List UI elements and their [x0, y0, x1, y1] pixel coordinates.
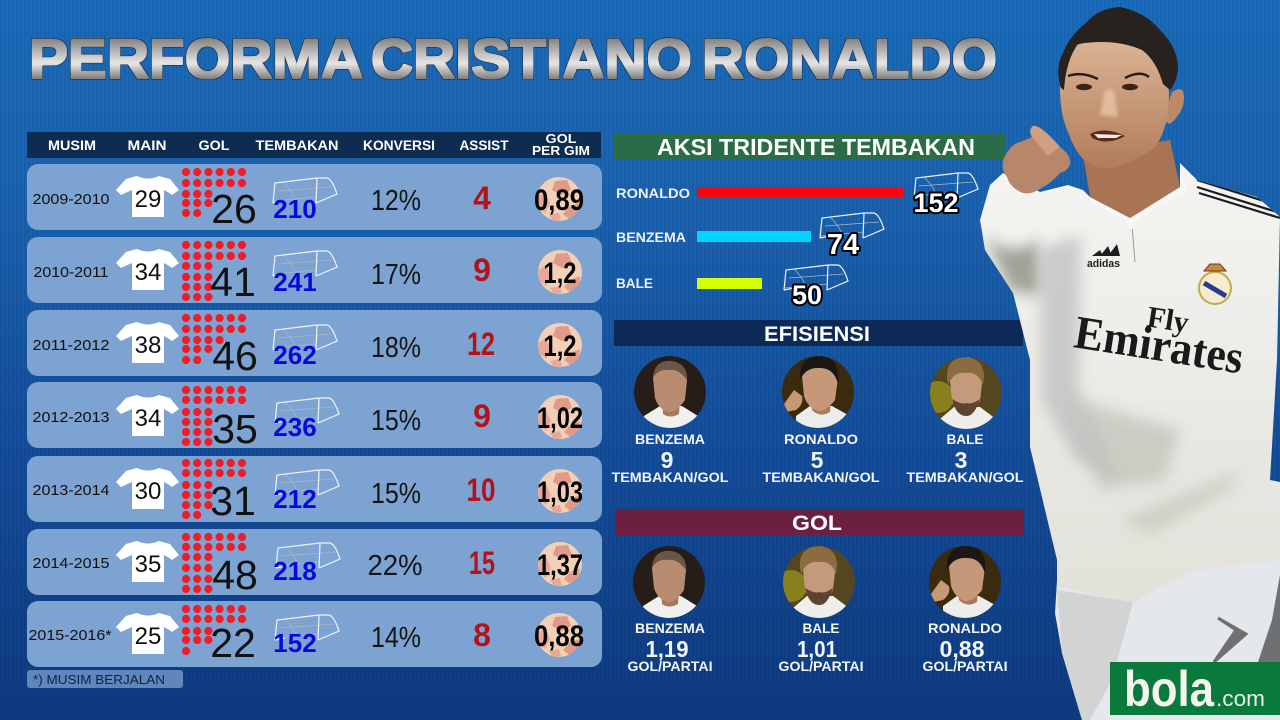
table header: MUSIM [48, 138, 96, 153]
row 2011-2012: 38 [135, 332, 161, 359]
player: Benzema: 1,19 [646, 636, 688, 662]
neck [1083, 140, 1180, 218]
jersey [980, 163, 1280, 602]
player: Benzema: BENZEMA [635, 620, 705, 636]
shorts [1055, 550, 1280, 720]
row 2014-2015: 218 [273, 556, 317, 586]
row 2011-2012: 1,2 [544, 330, 576, 363]
player: Bale: 1,01 [797, 636, 837, 662]
row 2014-2015: 2014-2015 [32, 555, 109, 572]
row 2011-2012 [27, 310, 602, 379]
row 2013-2014: 2013-2014 [32, 482, 109, 499]
row 2012-2013 [27, 382, 602, 452]
row 2009-2010: 29 [135, 186, 161, 213]
player: Benzema: BENZEMA [635, 431, 705, 447]
row 2010-2011: 1,2 [544, 257, 576, 290]
row 2012-2013: 236 [273, 412, 317, 442]
head [1058, 7, 1184, 169]
footnote: *) MUSIM BERJALAN [33, 672, 165, 687]
footnote [27, 670, 183, 688]
panel: efisiensi [612, 320, 1024, 485]
player: Benzema: GOL/PARTAI [628, 658, 712, 674]
row 2010-2011 [27, 237, 602, 305]
player: Bale: GOL/PARTAI [778, 658, 864, 674]
row 2013-2014: 31 [210, 478, 256, 524]
row 2015-2016: 8 [473, 617, 491, 653]
row 2011-2012: 262 [273, 340, 317, 370]
row 2014-2015: 22% [368, 550, 422, 582]
player: Benzema [628, 546, 712, 674]
player: Bale: BALE [802, 620, 840, 636]
row 2012-2013: 9 [473, 398, 491, 434]
row 2009-2010: 210 [273, 194, 317, 224]
row 2009-2010: 26 [211, 186, 257, 232]
table header [27, 132, 601, 158]
pointing hand [1003, 126, 1070, 193]
player: Ronaldo: TEMBAKAN/GOL [762, 469, 880, 485]
player: Ronaldo [922, 545, 1008, 674]
club crest [1199, 264, 1231, 304]
bar: Ronaldo [616, 173, 978, 218]
player: Benzema [612, 356, 729, 485]
row 2015-2016: 25 [135, 623, 161, 650]
row 2009-2010: 4 [473, 180, 491, 216]
row 2014-2015: 1,37 [537, 549, 583, 582]
player: Benzema: TEMBAKAN/GOL [612, 469, 729, 485]
row 2012-2013: 15% [371, 405, 421, 437]
player: Bale: TEMBAKAN/GOL [906, 469, 1024, 485]
illustration: Cristiano Ronaldo pointing [980, 7, 1280, 720]
bar: Bale [616, 265, 848, 310]
panel: aksi trident tembakan [614, 133, 1006, 310]
logo: bola.com: bola [1124, 661, 1215, 717]
row 2012-2013: 2012-2013 [32, 409, 109, 426]
player: Ronaldo: RONALDO [928, 620, 1002, 636]
row 2009-2010: 0,89 [534, 184, 584, 217]
sponsor text: Emirates [1071, 306, 1247, 384]
row 2014-2015 [27, 529, 602, 598]
heading [614, 320, 1023, 346]
table header: TEMBAKAN [256, 138, 338, 153]
table header: GOL [198, 138, 230, 153]
logo: bola.com [1110, 661, 1280, 717]
heading [615, 509, 1024, 535]
title: PERFORMA CRISTIANO RONALDO [29, 27, 997, 90]
table header: MAIN [128, 138, 166, 153]
heading: AKSI TRIDENTE TEMBAKAN [657, 134, 975, 160]
player: Ronaldo: 0,88 [940, 636, 985, 662]
row 2010-2011: 241 [273, 267, 317, 297]
table header: ASSIST [460, 138, 509, 153]
row 2009-2010: 2009-2010 [32, 191, 109, 208]
bar: Benzema [616, 213, 884, 261]
row 2011-2012: 46 [212, 333, 258, 379]
row 2015-2016 [27, 601, 602, 667]
brand logo on jersey [1087, 244, 1120, 270]
row 2015-2016: 14% [371, 622, 421, 654]
row 2015-2016: 2015-2016* [28, 627, 112, 644]
row 2010-2011: 2010-2011 [34, 264, 108, 281]
row 2012-2013: 34 [135, 405, 161, 432]
player: Bale [775, 546, 864, 674]
player: Ronaldo: 5 [811, 447, 824, 473]
player: Ronaldo: GOL/PARTAI [922, 658, 1008, 674]
table header: KONVERSI [363, 138, 435, 153]
table header: PER GIM [532, 144, 590, 158]
player: Benzema: 9 [661, 447, 673, 473]
row 2014-2015: 35 [135, 551, 161, 578]
brand logo on jersey: adidas [1087, 258, 1120, 270]
row 2014-2015: 15 [469, 545, 495, 581]
bar: Benzema: 74 [827, 229, 859, 261]
row 2015-2016: 0,88 [534, 620, 584, 653]
row 2015-2016: 22 [210, 620, 256, 666]
row 2010-2011: 9 [473, 252, 491, 288]
row 2013-2014: 212 [273, 484, 317, 514]
player: Bale: BALE [946, 431, 984, 447]
panel: season statistics table [27, 132, 602, 667]
player: Ronaldo [762, 355, 880, 485]
row 2010-2011: 34 [135, 259, 161, 286]
row 2013-2014: 30 [135, 478, 161, 505]
bar: Ronaldo: 152 [913, 188, 959, 218]
bar: Bale: BALE [616, 275, 653, 291]
panel: gol [615, 509, 1024, 674]
row 2014-2015: 48 [212, 552, 258, 598]
table header: GOL [546, 132, 577, 146]
row 2009-2010: 12% [371, 185, 421, 217]
sponsor text: Fly [1145, 300, 1191, 340]
row 2015-2016: 152 [273, 628, 317, 658]
row 2011-2012: 12 [467, 326, 495, 362]
row 2010-2011: 41 [210, 259, 256, 305]
jersey shading [985, 170, 1280, 535]
heading: GOL [792, 512, 842, 535]
player: Bale [906, 357, 1024, 485]
row 2012-2013: 1,02 [537, 402, 583, 435]
player: Bale: 3 [955, 447, 967, 473]
row 2013-2014: 15% [371, 478, 421, 510]
player: Ronaldo: RONALDO [784, 431, 858, 447]
row 2013-2014: 1,03 [537, 476, 583, 509]
heading: EFISIENSI [764, 323, 870, 346]
row 2013-2014: 10 [466, 472, 496, 508]
row 2009-2010 [27, 164, 602, 232]
bar: Bale: 50 [792, 280, 822, 310]
row 2012-2013: 35 [212, 406, 258, 452]
row 2010-2011: 17% [371, 259, 421, 291]
row 2011-2012: 2011-2012 [32, 337, 110, 354]
bar: Benzema: BENZEMA [616, 229, 686, 245]
logo: bola.com: .com [1216, 686, 1265, 711]
row 2011-2012: 18% [371, 332, 421, 364]
row 2013-2014 [27, 456, 602, 524]
bar: Ronaldo: RONALDO [616, 185, 690, 201]
